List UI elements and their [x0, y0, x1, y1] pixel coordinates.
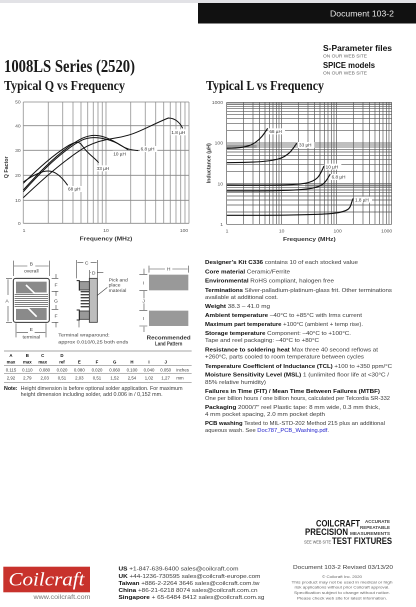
diagram: top view: G: [54, 298, 58, 304]
diagram: top view: A: [5, 298, 9, 304]
table row: inches: 0.060: [109, 367, 121, 372]
table header: G: [113, 359, 117, 364]
table row: inches: 0.040: [144, 367, 155, 372]
table header: B: [26, 353, 29, 358]
table row: millimetres: 1,02: [145, 375, 154, 380]
diagram: top view: F: [54, 283, 58, 289]
table row: inches: 0.115: [6, 367, 17, 372]
axis labels: [207, 100, 392, 243]
specifications text block: Environmental RoHS compliant, halogen free: [205, 279, 334, 285]
curve: 10 uH: [227, 166, 324, 185]
curve labels: 68 µH: [68, 187, 81, 192]
table header: max: [38, 359, 48, 364]
curve labels: 10 µH: [326, 164, 338, 169]
curve labels: 68 µH: [269, 129, 282, 134]
contact list: [118, 566, 265, 601]
table row: inches: 0.080: [39, 367, 51, 372]
table header: max: [7, 359, 16, 364]
Coilcraft logo: www.coilcraft.com: [32, 594, 90, 601]
axis labels: Frequency (MHz): [283, 237, 336, 243]
dimension diagrams: [5, 260, 191, 348]
table row: inches: inches: [176, 367, 189, 372]
specifications text block: Temperature Coefficient of Inductance (TCL) +100 to +350 ppm/°C: [205, 364, 392, 370]
axis labels: Q Factor: [4, 156, 10, 178]
test fixtures badge: COILCRAFT: [316, 519, 360, 529]
diagram: top view: E: [30, 327, 34, 333]
title: 1008LS Series (2520): [4, 56, 135, 76]
test fixtures badge: TEST FIXTURES: [332, 536, 392, 546]
specifications text block: Moisture Sensitivity Level (MSL) 1 (unlimited floor life at <30°C /: [205, 373, 390, 379]
contact list: China +86-21-6218 8074 sales@coilcraft.com.cn: [118, 588, 258, 594]
table header: I: [148, 359, 150, 364]
document revision footer: [292, 565, 393, 600]
table header: A: [9, 353, 13, 358]
document revision footer: This product may not be used in medical or high: [292, 580, 392, 584]
diagram: recommended land pattern: H: [167, 267, 171, 273]
curve labels: 1.8 µH: [171, 130, 185, 135]
table row: millimetres: 0,51: [58, 375, 67, 380]
axis labels: 1: [220, 222, 223, 228]
curve labels: [67, 129, 188, 192]
axis labels: 1: [23, 228, 26, 234]
specifications text block: PCB washing Tested to MIL-STD-202 Method 215 plus an additional: [205, 421, 385, 427]
table header: D: [60, 353, 64, 358]
table header: E: [78, 359, 81, 364]
diagram: side view: D: [92, 271, 96, 277]
diagram: side view: material: [109, 288, 126, 294]
specifications text block: One per billion hours / one billion hours, calculated per Telcordia SR-332: [205, 396, 390, 402]
diagram: side view: C: [85, 260, 89, 266]
table header: F: [96, 359, 99, 364]
curve labels: 10 µH: [113, 151, 126, 156]
axis labels: Inductance (µH): [207, 143, 213, 183]
specifications text block: Storage temperature Component: –40°C to +100°C.: [205, 331, 351, 337]
document revision footer: Specification subject to change without notice.: [294, 590, 390, 595]
specifications text block: Maximum part temperature +100°C (ambient + temp rise).: [205, 322, 363, 328]
Coilcraft logo: Coilcraft: [8, 570, 85, 590]
axis labels: 50: [15, 100, 21, 106]
diagram: top view: terminal: [22, 335, 40, 341]
axis labels: 100: [333, 228, 342, 234]
specifications text block: 85% relative humidity): [205, 380, 266, 386]
axis labels: 1: [226, 228, 229, 234]
table row: millimetres: 2,03: [40, 375, 49, 380]
document header bar: Document 103-2: [330, 10, 395, 19]
diagram: side view: [58, 260, 129, 346]
table row: millimetres: 2,03: [75, 375, 84, 380]
curve labels: 1.8 µH: [355, 197, 369, 202]
table note: [4, 386, 183, 398]
table row: inches: 0.020: [92, 367, 103, 372]
curve: 10 uH: [23, 135, 128, 190]
axis labels: 10: [103, 228, 109, 234]
specifications text block: available at additional cost.: [205, 295, 278, 301]
table row: millimetres: [7, 375, 184, 380]
contact list: UK +44-1236-730595 sales@coilcraft-europe.com: [118, 574, 261, 580]
specifications text block: Core material Ceramic/Ferrite: [205, 270, 290, 276]
table row: inches: [6, 367, 189, 372]
axis labels: 100: [215, 140, 223, 146]
diagram: recommended land pattern: Recommended: [147, 336, 191, 342]
curve labels: [268, 128, 372, 203]
diagram: top view: overall: [24, 269, 39, 275]
diagram: top view: F: [54, 313, 58, 319]
diagram: recommended land pattern: I: [143, 280, 144, 286]
axis labels: 100: [180, 228, 188, 234]
document header bar: [198, 3, 416, 24]
table row: millimetres: 2,54: [128, 375, 137, 380]
table note: Note:: [4, 386, 18, 392]
curve: 6.8 uH: [23, 138, 138, 192]
specifications text block: +260°C, parts cooled to room temperature between cycles: [205, 355, 364, 361]
curve: 6.8 uH: [227, 174, 330, 191]
heading: L chart: Typical L vs Frequency: [206, 78, 324, 93]
table header: [7, 353, 167, 364]
diagram: side view: Terminal wraparound:: [58, 332, 110, 338]
table header: C: [41, 353, 44, 358]
test fixtures badge: ACCURATE: [365, 519, 390, 524]
diagram: top view: [5, 261, 58, 341]
axis labels: 1000: [212, 100, 223, 106]
axis labels: 20: [15, 173, 21, 179]
specifications text block: 4 mm pocket spacing, 2.0 mm pocket depth: [205, 412, 325, 418]
curve: 1.8 uH: [23, 118, 183, 198]
specifications text block: [205, 260, 392, 434]
specifications text block: Terminations Silver-palladium-platinum-glass frit. Other terminations: [205, 288, 392, 294]
document revision footer: Please check web site for latest information.: [297, 596, 387, 600]
contact list: Taiwan +886-2-2264 3646 sales@coilcraft.com.tw: [118, 581, 260, 587]
table row: inches: 0.020: [57, 367, 68, 372]
curve: 1.8 uH: [227, 198, 353, 215]
axis labels: Frequency (MHz): [80, 236, 133, 242]
diagram: recommended land pattern: Land Pattern: [155, 342, 182, 348]
web site resources note: SPICE models: [323, 61, 376, 70]
diagram: side view: approx 0.010/0,25 both ends: [58, 340, 129, 346]
document revision footer: Document 103-2 Revised 03/13/20: [293, 565, 393, 571]
test fixtures badge: MEASUREMENTS: [350, 531, 390, 536]
axis labels: 0: [18, 221, 21, 227]
curve labels: 33 µH: [299, 143, 312, 148]
document revision footer: © Coilcraft Inc. 2020: [322, 574, 363, 579]
table note: height dimension including solder, add 0.006 in / 0,152 mm.: [21, 392, 163, 398]
curve: 33 uH: [227, 143, 297, 163]
specifications text block: Packaging 2000/7″ reel Plastic tape: 8 mm wide, 0.3 mm thick,: [205, 405, 380, 411]
table row: millimetres: 0,51: [93, 375, 102, 380]
contact list: Singapore + 65-6484 8412 sales@coilcraft.com.sg: [118, 595, 265, 601]
specifications text block: Ambient temperature –40°C to +85°C with Irms current: [205, 313, 363, 319]
diagram: recommended land pattern: J: [142, 298, 145, 304]
axis labels: 10: [279, 228, 285, 234]
dimensions table: [4, 351, 192, 383]
diagram: side view: Pick and: [109, 277, 128, 283]
axis labels: 30: [15, 148, 21, 154]
axis labels: 10: [217, 182, 223, 188]
heading: Q chart: Typical Q vs Frequency: [4, 78, 125, 93]
table row: millimetres: mm: [176, 375, 184, 380]
curve labels: 6.8 µH: [141, 147, 154, 152]
table row: inches: 0.080: [74, 367, 85, 372]
contact list: US +1-847-639-6400 sales@coilcraft.com: [118, 566, 239, 572]
specifications text block: Designer’s Kit C336 contains 10 of each stocked value: [205, 260, 358, 266]
table row: millimetres: 1,52: [110, 375, 119, 380]
table row: inches: 0.110: [22, 367, 33, 372]
test fixtures badge: PRECISION: [305, 527, 348, 537]
test fixtures badge: REPEATABLE: [360, 525, 390, 530]
table row: inches: 0.050: [160, 367, 172, 372]
web site resources note: S-Parameter files: [323, 44, 393, 53]
chart: Q vs frequency: [4, 100, 189, 242]
table header: max: [23, 359, 32, 364]
table header: J: [164, 359, 167, 364]
axis labels: 40: [15, 123, 21, 129]
table row: millimetres: 1,27: [161, 375, 170, 380]
table row: millimetres: 2,92: [7, 375, 16, 380]
specifications text block: Weight 38.3 – 41.0 mg: [205, 304, 270, 310]
specifications text block: Resistance to soldering heat Max three 40 second reflows at: [205, 348, 379, 354]
specifications text block: Tape and reel packaging: –40°C to +80°C: [205, 338, 319, 344]
diagram: recommended land pattern: [139, 266, 191, 348]
web site resources note: ON OUR WEB SITE: [323, 70, 367, 76]
test fixtures badge: [304, 519, 392, 546]
specifications text block: aqueous wash. See Doc787_PCB_Washing.pdf .: [205, 428, 329, 434]
curve: 33 uH: [23, 142, 99, 183]
diagram: top view: B: [30, 261, 34, 267]
document revision footer: risk applications without prior Coilcraft approval.: [294, 584, 390, 590]
curve: 68 uH: [227, 128, 268, 148]
table row: inches: 0.100: [127, 367, 138, 372]
axis labels: 1000: [381, 228, 392, 234]
chart: L vs frequency: [207, 100, 392, 243]
web site resources note: ON OUR WEB SITE: [323, 54, 367, 58]
diagram: recommended land pattern: I: [143, 316, 144, 322]
web site resources note: [323, 44, 393, 76]
curve labels: 33 µH: [97, 166, 109, 171]
table row: millimetres: 2,79: [23, 375, 32, 380]
axis labels: [4, 100, 188, 242]
table note: Height dimension is before optional solder application. For maximum: [21, 386, 183, 392]
curve: 68 uH: [23, 171, 68, 185]
curve labels: 6.8 µH: [332, 175, 345, 180]
table header: H: [130, 359, 134, 364]
table header: ref: [59, 359, 65, 364]
test fixtures badge: SEE WEB SITE: [304, 540, 331, 545]
diagram: side view: place: [109, 283, 121, 289]
top band: [0, 0, 416, 3]
specifications text block: Failures in Time (FIT) / Mean Time Between Failures (MTBF): [205, 389, 380, 395]
Coilcraft logo: [3, 567, 90, 601]
axis labels: 10: [15, 198, 21, 204]
